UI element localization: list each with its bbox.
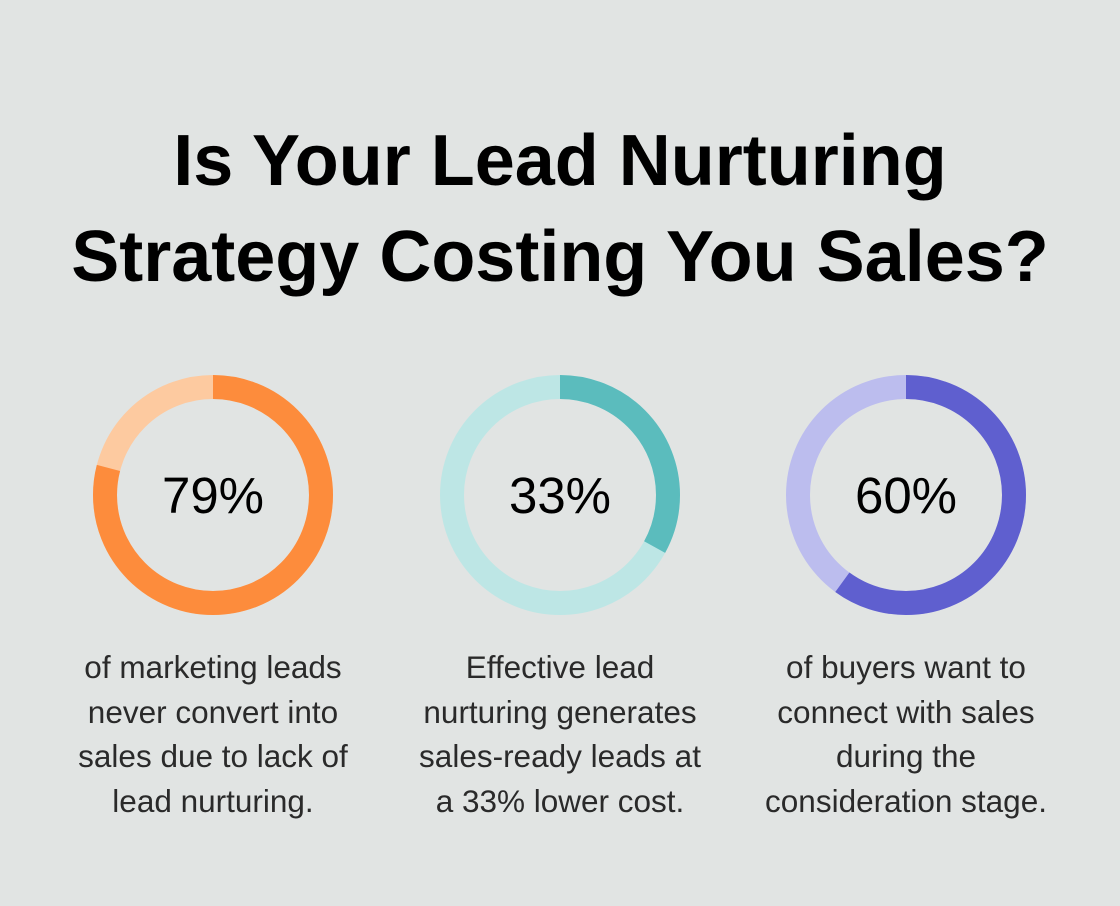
title [71,121,1049,297]
donut: 33%: 33% [509,467,611,524]
title: Is Your Lead Nurturing [173,121,947,201]
caption: 79%: never convert into [88,694,338,730]
caption: 60% [765,649,1047,818]
caption: 60%: of buyers want to [786,649,1026,685]
donut: 79% [93,375,333,615]
caption: 33% [419,649,701,818]
donut: 60%: 60% [855,467,957,524]
caption: 79%: lead nurturing. [112,782,314,818]
caption: 79% [78,649,348,818]
caption: 33%: nurturing generates [423,694,697,730]
title: Strategy Costing You Sales? [71,217,1049,297]
caption: 60%: during the [836,738,976,774]
caption: 60%: consideration stage. [765,782,1047,818]
donut: 60% [786,375,1026,615]
caption: 33%: Effective lead [466,649,654,685]
donut: 79%: 79% [162,467,264,524]
donut: 33% [440,375,680,615]
caption: 33%: a 33% lower cost. [436,782,684,818]
caption: 60%: connect with sales [777,694,1035,730]
caption: 33%: sales-ready leads at [419,738,701,774]
caption: 79%: sales due to lack of [78,738,348,774]
caption: 79%: of marketing leads [84,649,342,685]
